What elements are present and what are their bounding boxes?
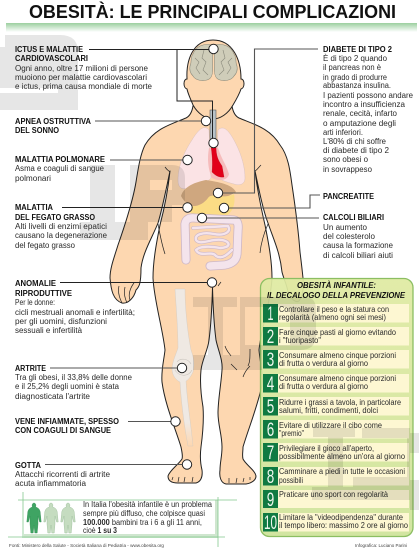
text: ictus: muoiono per malattie cardiovascolari xyxy=(15,73,147,82)
item 3 xyxy=(263,350,409,371)
item 3: Consumare almeno cinque porzioni xyxy=(279,351,396,360)
callout text: cioè 1 su 3 xyxy=(83,526,118,535)
item 2 xyxy=(263,327,409,348)
item 6 xyxy=(263,420,409,441)
item 2: i "fuoripasto" xyxy=(279,336,321,345)
gallbladder and pancreas xyxy=(184,194,234,219)
heart and vessels xyxy=(208,148,229,180)
text: diabete: sono obesi o xyxy=(323,155,369,164)
panel heading xyxy=(267,280,405,300)
item 1 xyxy=(263,304,409,325)
callout frame xyxy=(8,492,237,547)
text: malattia polmonare: MALATTIA POLMONARE xyxy=(15,155,105,164)
text: diabete: abbastanza insulina. xyxy=(323,81,391,90)
text: calcoli biliari: Un aumento xyxy=(323,223,368,232)
icon: child figure xyxy=(61,503,75,533)
item 5 xyxy=(263,397,409,418)
lungs xyxy=(178,128,245,189)
item 10: 10 xyxy=(264,513,277,534)
text: ictus: Ogni anno, oltre 17 milioni di persone xyxy=(15,64,148,73)
text: vene infiammate: CON COAGULI DI SANGUE xyxy=(15,426,111,435)
item 6: 6 xyxy=(267,420,274,441)
text: anomalie riproduttive: RIPRODUTTIVE xyxy=(15,289,72,298)
item 1: 1 xyxy=(268,304,274,325)
item 10: il tempo libero: massimo 2 ore al giorno xyxy=(279,521,409,530)
item 2: Fare cinque pasti al giorno evitando xyxy=(279,328,397,337)
icon: child figure, highlighted xyxy=(27,503,41,533)
large intestine xyxy=(185,218,238,266)
text: pancreatite: PANCREATITE xyxy=(323,192,374,201)
text: anomalie riproduttive: cicli mestruali anomali e infertilità; xyxy=(15,308,135,317)
title band xyxy=(6,23,417,32)
text: diabete: o amputazione degli xyxy=(323,119,396,128)
text: artrite: diagnosticata l'artrite xyxy=(15,392,90,401)
item 8 xyxy=(263,467,409,488)
head xyxy=(184,40,244,119)
item 4: 4 xyxy=(267,374,275,395)
text: diabete: renale, cecità, infarto xyxy=(323,109,398,118)
text: malattia polmonare xyxy=(15,155,105,183)
knee joint xyxy=(175,359,192,375)
panel background xyxy=(260,278,413,536)
item 3: 3 xyxy=(267,350,274,371)
text: anomalie riproduttive: sessuali e infertilità xyxy=(15,326,83,335)
item 10: Limitare la "videodipendenza" durante xyxy=(279,513,403,522)
connection nodes xyxy=(171,44,229,469)
item 1: regolarità (almeno ogni sei mesi) xyxy=(279,313,386,322)
panel heading: IL DECALOGO DELLA PREVENZIONE xyxy=(267,291,405,300)
item 10 xyxy=(263,513,409,534)
callout text xyxy=(83,500,213,535)
text: diabete: incontro a insufficienza xyxy=(323,100,406,109)
item 1: Controllare il peso e la statura con xyxy=(279,305,389,314)
item 7: possibilmente almeno un'ora al giorno xyxy=(279,452,406,461)
text: vene infiammate xyxy=(15,417,119,435)
text: diabete xyxy=(323,45,413,174)
item 4 xyxy=(263,374,409,395)
text: artrite: ARTRITE xyxy=(15,364,46,373)
item 9: Praticare uno sport con regolarità xyxy=(279,490,389,499)
item 5: Ridurre i grassi a tavola, in particolare xyxy=(279,398,401,407)
item 4: Consumare almeno cinque porzioni xyxy=(279,374,396,383)
text: calcoli biliari: di calcoli biliari aiuti xyxy=(323,251,393,260)
text: artrite: Tra gli obesi, il 33,8% delle donne xyxy=(15,373,132,382)
text: ictus: e ictus, prima causa mondiale di morte xyxy=(15,82,152,91)
text: anomalie riproduttive: Per le donne: xyxy=(15,298,55,307)
text: diabete: di diabete di tipo 2 xyxy=(323,146,389,155)
callout text: 100.000 bambini tra i 6 a gli 11 anni, xyxy=(83,518,202,527)
text: fegato grasso: DEL FEGATO GRASSO xyxy=(15,213,95,222)
item 3: di frutta o verdura al giorno xyxy=(279,359,369,368)
body creases xyxy=(118,165,268,483)
brain xyxy=(190,44,237,81)
source: Fonti: Ministero della Salute - Società Italiana di Pediatria - www.obesita.org xyxy=(9,543,164,549)
text: fegato grasso: MALATTIA xyxy=(15,203,53,212)
text: fegato grasso xyxy=(15,203,107,250)
text: gotta: acuta infiammatoria xyxy=(15,479,87,488)
leg bone xyxy=(172,289,194,446)
item 5: 5 xyxy=(267,397,274,418)
item 9 xyxy=(263,490,409,511)
text: diabete: in sovrappeso xyxy=(323,165,373,174)
text: malattia polmonare: polmonari xyxy=(15,174,51,183)
item 7: Privilegiare il gioco all'aperto, xyxy=(279,444,374,453)
text: calcoli biliari: CALCOLI BILIARI xyxy=(323,213,384,222)
credit: Infografica: Luciano Parini xyxy=(355,543,407,549)
panel heading: OBESITÀ INFANTILE: xyxy=(297,280,376,290)
item 5: salumi, fritti, condimenti, dolci xyxy=(279,406,378,415)
text: fegato grasso: del fegato grasso xyxy=(15,241,76,250)
text: artrite: e il 25,2% degli uomini è stata xyxy=(15,382,120,391)
item 8: Camminare a piedi in tutte le occasioni xyxy=(279,467,405,476)
text: calcoli biliari xyxy=(323,213,393,260)
text: anomalie riproduttive: ANOMALIE xyxy=(15,279,56,288)
text: calcoli biliari: causa la formazione xyxy=(323,241,393,250)
trachea xyxy=(210,110,216,143)
panel: decalogue of prevention xyxy=(260,278,413,536)
text: gotta: Attacchi ricorrenti di artrite xyxy=(15,470,110,479)
text: fegato grasso: Alti livelli di enzimi epatici xyxy=(15,222,107,231)
text: ictus: CARDIOVASCOLARI xyxy=(15,54,88,63)
callout: childhood obesity in Italy xyxy=(8,492,237,547)
icon: child figure xyxy=(44,503,58,533)
item 7: 7 xyxy=(267,443,274,464)
liver and stomach xyxy=(181,180,236,207)
item 8: possibili xyxy=(279,476,303,485)
text: calcoli biliari: del colesterolo xyxy=(323,232,376,241)
text: diabete: L'80% di chi soffre xyxy=(323,137,386,146)
callout text: In Italia l'obesità infantile è un problema xyxy=(83,500,213,509)
small intestine xyxy=(193,226,232,257)
item 6: Evitare di utilizzare il cibo come xyxy=(279,421,382,430)
item 2: 2 xyxy=(267,327,274,348)
text: diabete: È di tipo 2 quando xyxy=(323,54,388,63)
text: gotta: GOTTA xyxy=(15,461,41,470)
item 6: "premio" xyxy=(279,429,304,438)
text: ictus xyxy=(15,45,152,91)
text: diabete: il pancreas non è xyxy=(323,63,381,72)
text: diabete: in grado di produrre xyxy=(323,73,387,82)
text: apnea: DEL SONNO xyxy=(15,126,59,135)
text: anomalie riproduttive xyxy=(15,279,135,335)
leader lines xyxy=(45,49,320,464)
text: fegato grasso: causano la degenerazione xyxy=(15,231,107,240)
item 8: 8 xyxy=(267,467,274,488)
text: gotta xyxy=(15,461,110,488)
text: vene infiammate: VENE INFIAMMATE, SPESSO xyxy=(15,417,119,426)
text: artrite xyxy=(15,364,132,401)
text: anomalie riproduttive: per gli uomini, disfunzioni xyxy=(15,317,107,326)
title: OBESITÀ: LE PRINCIPALI COMPLICAZIONI xyxy=(29,1,396,22)
callout text: sempre più diffuso, che colpisce quasi xyxy=(83,509,205,518)
item 9: 9 xyxy=(267,490,274,511)
text: diabete: DIABETE DI TIPO 2 xyxy=(323,45,393,54)
body silhouette xyxy=(110,106,303,484)
text: diabete: I pazienti possono andare xyxy=(323,91,413,100)
text: malattia polmonare: Asma e coaguli di sangue xyxy=(15,164,104,173)
text: ictus: ICTUS E MALATTIE xyxy=(15,45,83,54)
text: apnea xyxy=(15,117,91,135)
item 7 xyxy=(263,443,409,464)
human body figure xyxy=(110,40,303,484)
item 4: di frutta o verdura al giorno xyxy=(279,382,369,391)
text: apnea: APNEA OSTRUTTIVA xyxy=(15,117,91,126)
text: diabete: arti inferiori. xyxy=(323,128,363,137)
